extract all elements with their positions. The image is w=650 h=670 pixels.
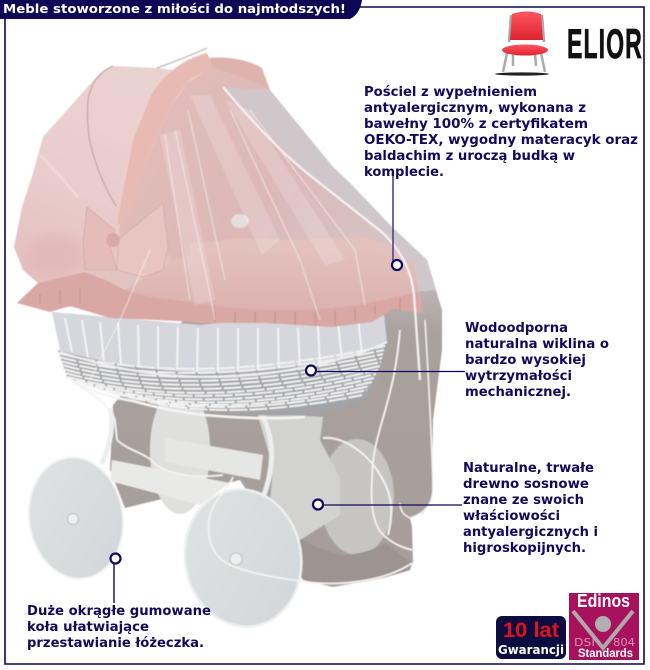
text: bedding: komplecie.	[364, 165, 444, 180]
leader line: wicker	[316, 370, 465, 372]
canopy	[14, 66, 173, 308]
gathered pink under hood	[110, 255, 185, 312]
grey veil wedge	[223, 87, 436, 292]
marker: wood	[313, 500, 323, 510]
right wheel	[174, 480, 312, 636]
mattress rim	[100, 252, 423, 327]
tulle sheets	[160, 95, 345, 305]
liner pleats	[65, 318, 362, 372]
text: wheels: Duże okrągłe gumowane	[27, 604, 211, 619]
logo: Elior chair	[495, 12, 642, 76]
badge: Edinos DSI standards: 804	[613, 636, 635, 649]
callout: bedding	[364, 85, 638, 270]
leader line: bedding	[392, 173, 394, 262]
icon: chair back	[510, 12, 543, 40]
text: wicker	[465, 321, 609, 400]
badge: 10 year warranty: 10 lat	[503, 619, 559, 642]
badge: Edinos DSI standards: DSI	[574, 636, 595, 649]
bow	[83, 203, 168, 277]
wicker basket	[58, 342, 387, 418]
text: bedding: bawełny 100% z certyfikatem	[364, 117, 588, 132]
text: wheels: koła ułatwiające	[27, 620, 149, 635]
left wheel	[21, 451, 131, 585]
floor shadow	[300, 538, 412, 584]
text: wood: drewno sosnowe	[463, 477, 589, 492]
text: wood: znane ze swoich	[463, 493, 584, 508]
veil ribbons	[70, 87, 433, 583]
header text: Meble stoworzone z miłości do najmłodszych!	[3, 2, 346, 16]
upper crossbar	[165, 438, 263, 480]
text: wicker: bardzo wysokiej	[465, 353, 586, 368]
leader line: wheels	[113, 563, 115, 603]
text: bedding: Pościel z wypełnieniem	[364, 85, 537, 100]
hood bar	[117, 53, 213, 225]
callout: wood	[313, 461, 598, 556]
callout: wicker	[306, 321, 609, 400]
interior seen through veil	[116, 66, 412, 265]
text: wood: właściowości	[463, 509, 560, 524]
badge: Edinos DSI standards: Standards	[578, 646, 633, 660]
basket liner	[52, 305, 387, 372]
hood ruffle	[205, 57, 270, 90]
canopy seam	[40, 155, 78, 197]
badge: Edinos DSI standards	[569, 591, 639, 660]
text: wood: antyalergicznych i	[463, 525, 598, 540]
canopy piping	[88, 66, 116, 206]
cradle illustration	[14, 48, 442, 636]
badge: 10 year warranty: Gwarancji	[498, 643, 564, 657]
text: wicker: mechanicznej.	[465, 385, 571, 400]
hood top piping	[157, 48, 207, 68]
header tab	[0, 0, 362, 19]
icon: chair seat	[502, 44, 548, 56]
text: wood: higroskopijnych.	[463, 541, 586, 556]
badge: Edinos DSI standards: Edinos	[577, 591, 630, 611]
text: wheels: przestawianie łóżeczka.	[27, 636, 204, 651]
lower crossbar	[110, 460, 230, 505]
callout: wheels	[27, 554, 211, 651]
rocker arcs	[102, 408, 272, 495]
text: wood: Naturalne, trwałe	[463, 461, 594, 476]
lower veil backdrop	[110, 228, 442, 587]
marker: wheels	[110, 554, 120, 564]
rear right wheel	[320, 439, 394, 555]
leader line: wood	[323, 504, 462, 506]
icon: chair legs	[503, 15, 545, 72]
rim frill	[17, 272, 423, 327]
text: wicker: wytrzymałości	[465, 369, 572, 384]
text: bedding: OEKO-TEX, wygodny materacyk oraz	[364, 133, 638, 148]
tulle strands	[90, 110, 365, 380]
badge: 10 year warranty	[496, 616, 566, 659]
wood support	[257, 413, 340, 540]
wordmark: ELIOR	[567, 21, 642, 68]
canopy shading	[27, 235, 83, 275]
text: wicker: naturalna wiklina o	[465, 337, 609, 352]
marker: wicker	[306, 366, 316, 376]
icon: toy in cradle	[231, 214, 249, 228]
icon: chair shadow	[495, 72, 549, 76]
text: wheels	[27, 604, 211, 651]
rear left wheel	[150, 386, 210, 514]
text: wicker: Wodoodporna	[465, 321, 568, 336]
text: bedding	[364, 85, 638, 180]
text: bedding: antyalergicznym, wykonana z	[364, 101, 586, 116]
marker: bedding	[392, 260, 402, 270]
inner bedding	[190, 236, 400, 262]
text: wood	[463, 461, 598, 556]
text: bedding: baldachim z uroczą budką w	[364, 149, 575, 164]
frill folds	[40, 288, 400, 326]
